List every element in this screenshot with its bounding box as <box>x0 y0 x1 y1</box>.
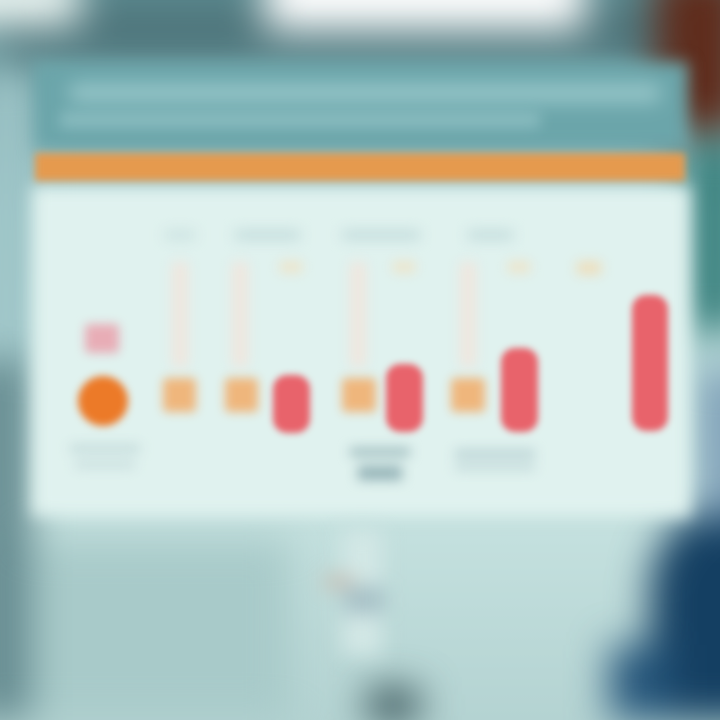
bar 2 <box>386 364 423 432</box>
chart: orange circle <box>78 376 128 426</box>
panel: header title band <box>34 62 688 150</box>
chart: pink marker <box>85 324 119 353</box>
orange banner <box>35 153 685 181</box>
bar 4 <box>632 295 668 431</box>
heading <box>70 84 660 102</box>
bar 1 <box>273 375 310 433</box>
panel: main chart board <box>32 186 690 516</box>
text: subtitle strip <box>60 112 540 128</box>
figure: small presenter in the foreground <box>322 532 386 661</box>
bar 3 <box>501 348 538 432</box>
